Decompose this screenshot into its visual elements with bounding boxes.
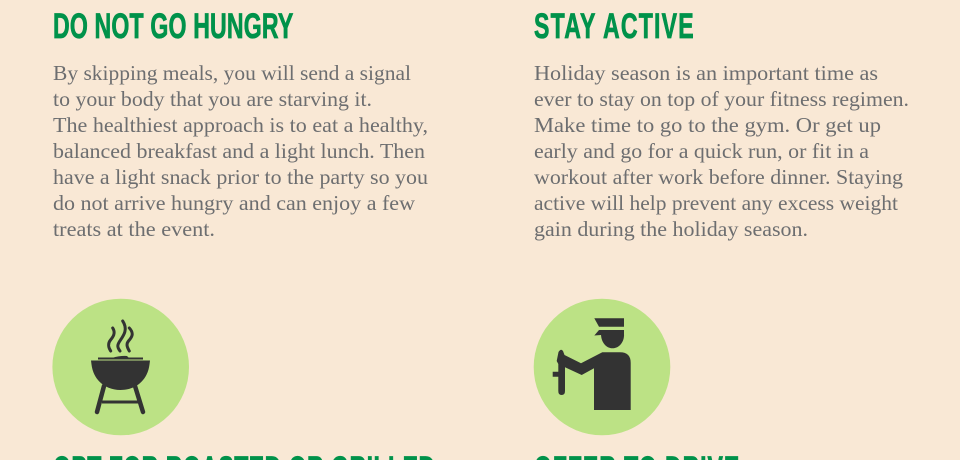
text block: stay active: ever to stay on top of your fitness regimen. [534, 87, 909, 111]
text block: stay active: gain during the holiday season. [534, 217, 808, 241]
text block: stay active [534, 61, 909, 241]
text block: do not go hungry: The healthiest approach is to eat a healthy, [53, 113, 428, 137]
text block: stay active: Make time to go to the gym. Or get up [534, 113, 881, 137]
heading: do not go hungry: DO NOT GO HUNGRY [53, 7, 293, 46]
text block: stay active: active will help prevent any excess weight [534, 191, 898, 215]
text block: do not go hungry: balanced breakfast and a light lunch. Then [53, 139, 426, 163]
icon: police officer [534, 299, 670, 435]
icon: grill [52, 299, 189, 435]
text block: do not go hungry: treats at the event. [53, 217, 215, 241]
text block: do not go hungry: have a light snack prior to the party so you [53, 165, 429, 189]
text block: do not go hungry: By skipping meals, you will send a signal [53, 61, 411, 85]
text block: do not go hungry [53, 61, 429, 241]
text block: do not go hungry: to your body that you are starving it. [53, 87, 372, 111]
heading: stay active: STAY ACTIVE [534, 7, 694, 46]
text block: stay active: early and go for a quick run, or fit in a [534, 139, 870, 163]
text block: stay active: Holiday season is an important time as [534, 61, 878, 85]
text block: stay active: workout after work before dinner. Staying [534, 165, 904, 189]
text block: do not go hungry: do not arrive hungry and can enjoy a few [53, 191, 416, 215]
